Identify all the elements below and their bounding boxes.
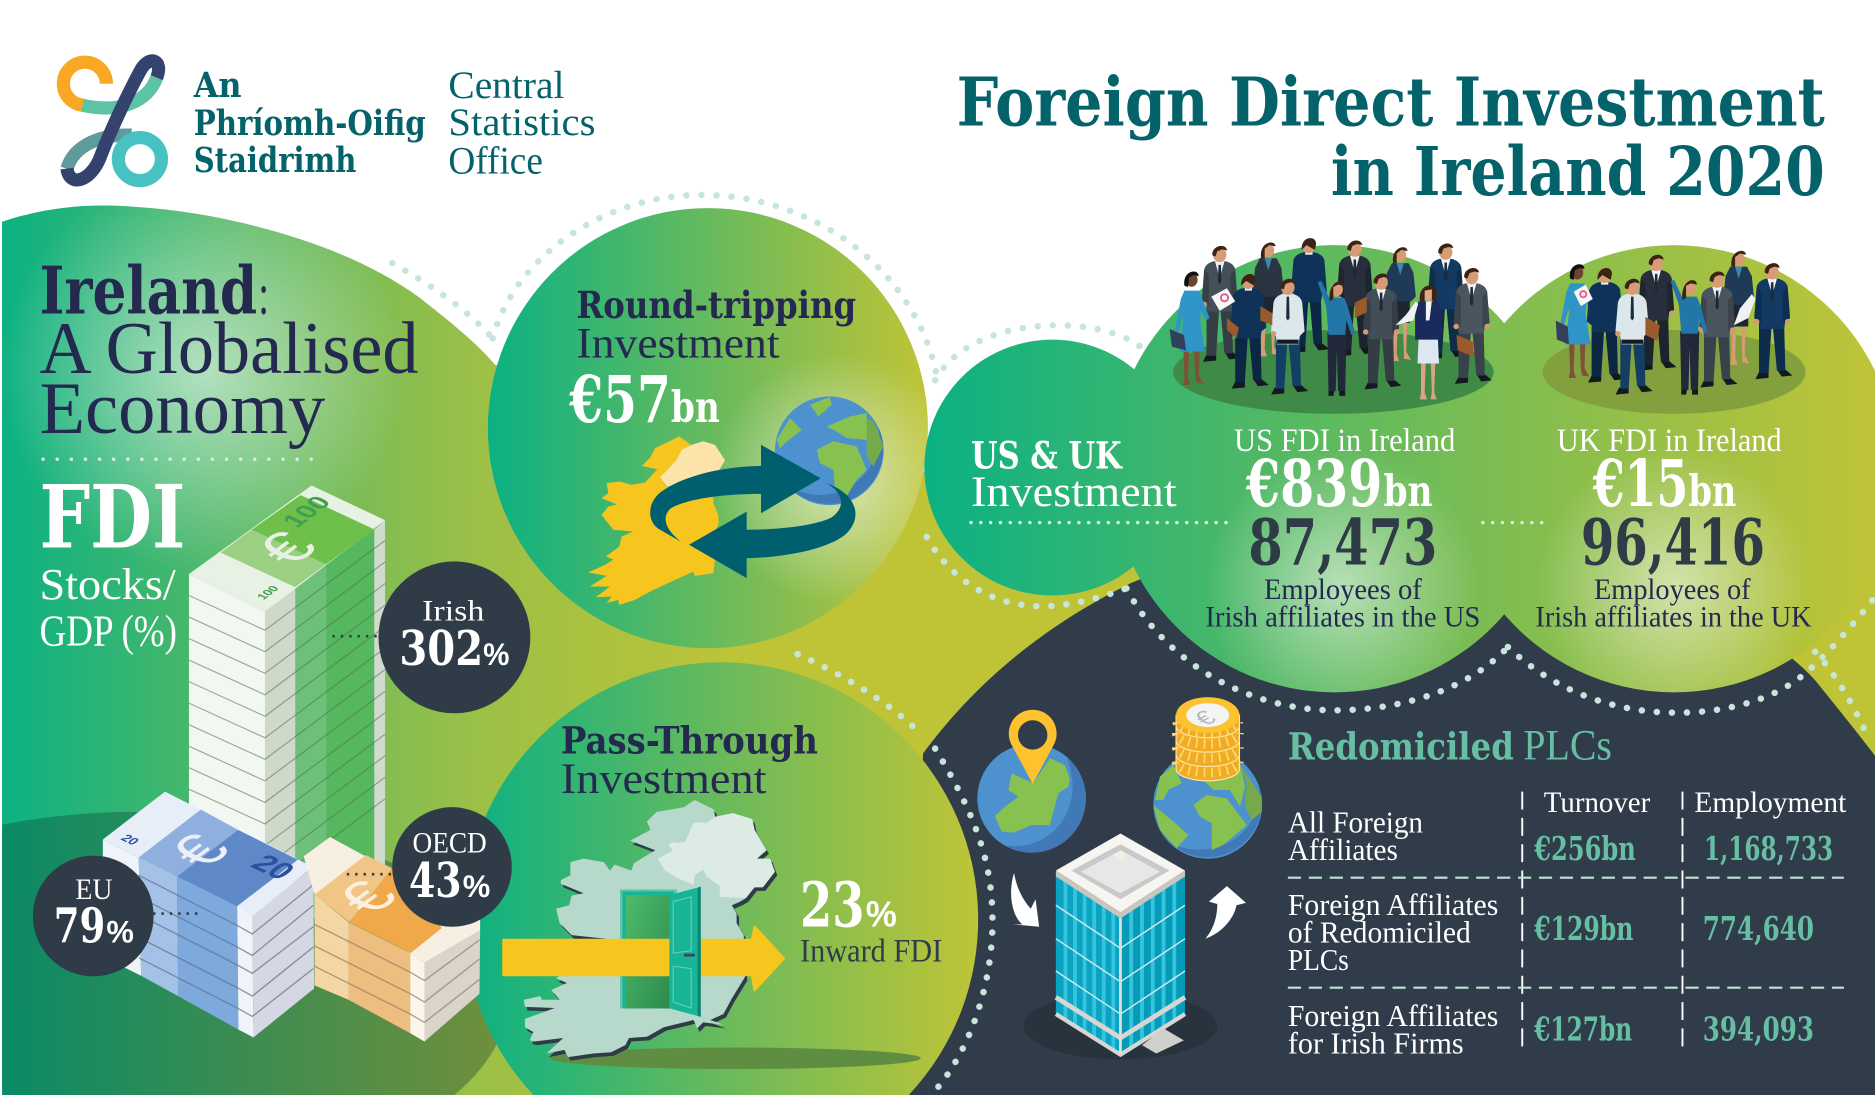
coin stack: [1176, 697, 1239, 781]
logo text: Irish name: Phríomh-Oifig: [194, 103, 426, 144]
row: all foreign affiliates: Affiliates: [1288, 832, 1398, 867]
briefcases and papers: [1169, 288, 1473, 356]
shadow: map: [550, 1048, 921, 1069]
value: 57bn: €57: [568, 362, 671, 438]
illustration: orange euro stack: [304, 837, 480, 1042]
callout: EU 79 percent: %: [106, 914, 134, 949]
label: UK employees: [1535, 573, 1812, 634]
background: dark green hill: [0, 812, 508, 1095]
heading: Ireland a globalised economy: [39, 251, 419, 450]
arrow: top circular arrow: [650, 445, 821, 542]
row: Irish firms: [1288, 998, 1814, 1060]
icon: globe: [775, 396, 884, 505]
heading: Redomiciled PLCs: PLCs: [1523, 722, 1612, 769]
value: 23 percent: 23: [800, 869, 865, 942]
panel: pass-through circle: [464, 662, 978, 1095]
subheading: investment: Investment: [561, 756, 767, 803]
icon: globe with coins: [1153, 697, 1262, 859]
value: 839bn: €839: [1245, 446, 1382, 522]
table: redomiciled PLC figures: [1288, 786, 1847, 1060]
row: redomiciled PLCs: €129bn: [1533, 910, 1633, 948]
row: all foreign affiliates: €256bn: [1533, 830, 1636, 868]
callout: OECD 43 percent: 43: [409, 853, 462, 909]
illustration: 20 euro stack: [103, 792, 314, 1037]
callout: EU 79 percent: 79: [54, 898, 105, 954]
value percent sign: %: [866, 895, 897, 935]
arrow: bottom circular arrow: [689, 483, 855, 578]
logo text: English name: Office: [448, 138, 543, 182]
label: UK employees: Irish affiliates in the UK: [1535, 601, 1812, 634]
row: Irish firms: €127bn: [1533, 1010, 1632, 1048]
heading: round-tripping: Round-tripping: [576, 283, 856, 327]
label: US FDI: US FDI in Ireland: [1234, 422, 1455, 458]
label: inward FDI: Inward FDI: [800, 932, 942, 968]
coin stack: €: [1190, 707, 1222, 731]
arrow: down into building: [1011, 873, 1039, 927]
dotted rule: [971, 521, 1551, 524]
value: UK employees: 96,416: [1581, 504, 1765, 579]
background: right olive wedge: [1782, 550, 1875, 789]
row: Irish firms: 394,093: [1703, 1010, 1814, 1048]
label: US employees: Irish affiliates in the US: [1205, 601, 1480, 634]
illustration: 100 euro stack: [189, 485, 385, 955]
callout: OECD 43 percent: [347, 807, 512, 927]
label: stocks GDP: [39, 560, 177, 656]
label: UK FDI: UK FDI in Ireland: [1557, 422, 1782, 458]
briefcases and papers: [1556, 285, 1755, 344]
column heads: Turnover: [1544, 786, 1650, 819]
arrow: up from building: [1205, 886, 1246, 939]
logo text: English name: Statistics: [448, 100, 596, 144]
heading: pass-through: Pass-Through: [561, 718, 818, 762]
panel: dark redomiciled background: [903, 548, 1875, 1095]
callout: Irish 302 percent: [332, 561, 530, 713]
value unit: bn: [1688, 467, 1736, 517]
value unit: bn: [671, 383, 720, 433]
logo text: Irish name: An: [193, 65, 242, 106]
heading: FDI: FDI: [39, 466, 185, 569]
callout: Irish 302 percent: 302: [399, 621, 483, 677]
row: redomiciled PLCs: PLCs: [1288, 942, 1349, 977]
heading: US and UK: US & UK: [971, 434, 1123, 478]
illustration: 100 euro stack: €: [243, 523, 333, 574]
dotted rule: [43, 458, 313, 461]
illustration: 100 euro stack: 100: [254, 583, 282, 602]
illustration: 100 euro stack: 100: [275, 492, 337, 531]
row: Irish firms: for Irish Firms: [1288, 1025, 1464, 1060]
heading: Redomiciled PLCs: Redomiciled: [1288, 724, 1514, 768]
heading: Ireland a globalised economy: Economy: [39, 368, 325, 450]
subheading: investment: Investment: [576, 321, 780, 368]
label: stocks GDP: GDP (%): [39, 607, 177, 656]
logo text: Irish name: Staidrimh: [194, 140, 356, 181]
icon: yellow Ireland map: [588, 436, 730, 605]
callout: EU 79 percent: [33, 856, 199, 976]
label: UK employees: Employees of: [1594, 573, 1751, 606]
value: 15bn: €15: [1592, 446, 1688, 522]
column heads: [1544, 786, 1847, 819]
title: [957, 63, 1825, 211]
logo text: Irish name: [193, 65, 426, 181]
callout: OECD 43 percent: OECD: [413, 827, 487, 860]
row: all foreign affiliates: [1288, 804, 1833, 868]
callout: Irish 302 percent: %: [483, 637, 509, 672]
row: redomiciled PLCs: 774,640: [1703, 910, 1814, 948]
label: stocks GDP: Stocks/: [39, 560, 177, 609]
logo text: English name: [448, 63, 596, 182]
panel: round-tripping circle: [488, 208, 928, 648]
illustration: orange euro stack: €: [323, 872, 413, 923]
illustration: 20 euro stack: €: [155, 826, 245, 876]
illustration: US business people: [1169, 238, 1494, 414]
background: left green panel: [0, 205, 1196, 1095]
dotted connector lines: [392, 195, 1875, 1091]
heading: Ireland a globalised economy: :: [258, 260, 269, 326]
illustration: 20 euro stack: 20: [118, 832, 143, 847]
row: redomiciled PLCs: Foreign Affiliates: [1288, 887, 1498, 922]
row: Irish firms: Foreign Affiliates: [1288, 998, 1498, 1033]
logo text: English name: Central: [448, 63, 564, 107]
panel: US and UK circles: [924, 245, 1875, 692]
column heads: Employment: [1694, 786, 1847, 819]
label: US employees: [1205, 573, 1480, 634]
row: all foreign affiliates: All Foreign: [1288, 804, 1423, 839]
icon: office tower: [1024, 833, 1217, 1059]
illustration: 20 euro stack: 20: [244, 849, 303, 885]
glow: left panel: [0, 205, 598, 598]
row: redomiciled PLCs: [1288, 887, 1814, 977]
illustration: UK business people: [1543, 251, 1806, 414]
row: redomiciled PLCs: of Redomiciled: [1288, 914, 1471, 949]
callout: EU 79 percent: EU: [75, 873, 112, 906]
callout: OECD 43 percent: %: [463, 869, 490, 904]
heading: Ireland a globalised economy: A Globalised: [39, 308, 419, 390]
callout: Irish 302 percent: Irish: [422, 595, 484, 628]
logo: CSO mark: [63, 61, 161, 181]
icon: door opening with arrow: [503, 887, 784, 1017]
icon: globe with Ireland and pin: [977, 710, 1086, 853]
heading: Ireland a globalised economy: Ireland: [39, 251, 257, 329]
value unit: bn: [1384, 467, 1433, 517]
subheading: investment: Investment: [971, 469, 1177, 516]
label: US employees: Employees of: [1264, 573, 1422, 606]
value: US employees: 87,473: [1248, 504, 1437, 579]
icon: Ireland map: [524, 800, 777, 1061]
